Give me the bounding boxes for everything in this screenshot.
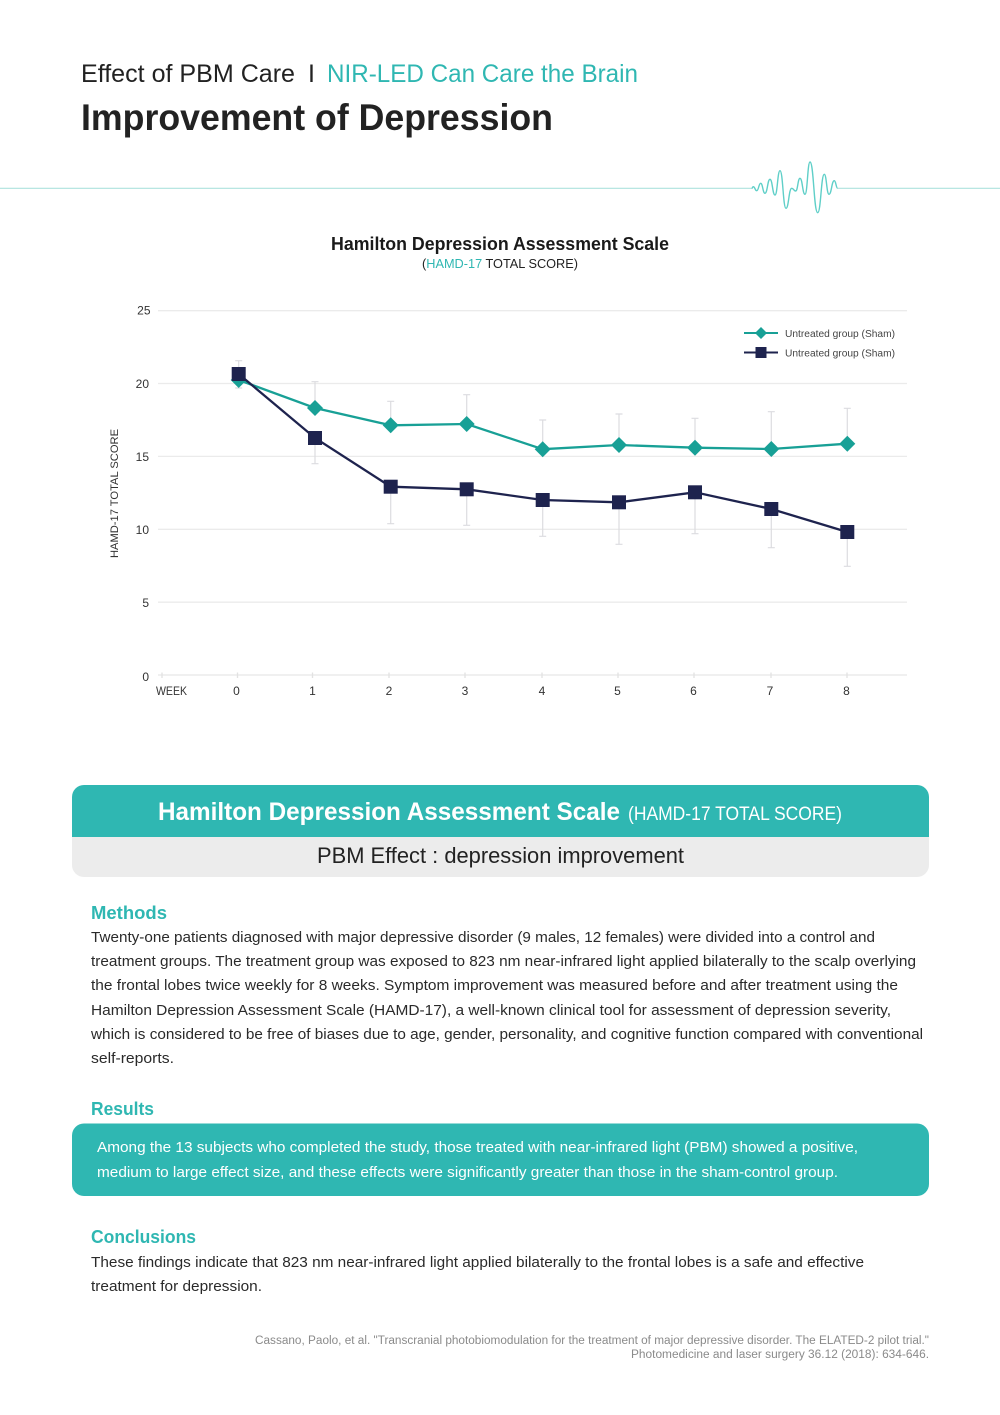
x axis labels: 2 [386,684,393,698]
y axis labels: 5 [142,596,149,610]
section: conclusions [91,1226,864,1295]
section: methods: Methods [91,902,167,923]
section: results: Among the 13 subjects who completed the study, those treated with near-infrared light (PBM) showed a positive, [97,1139,858,1156]
banner: (HAMD-17 TOTAL SCORE) [628,804,842,825]
y axis title: HAMD-17 TOTAL SCORE [109,429,121,558]
citation [255,1335,929,1361]
divider with waveform icon [0,162,1000,213]
x axis labels [156,684,850,698]
section: methods [90,902,923,1067]
title: subtitle line [81,60,638,88]
x axis labels: 0 [233,684,240,698]
section: methods: Hamilton Depression Assessment Scale (HAMD-17), a well-known clinical tool for assessment of depression severity, [91,1002,891,1019]
section: methods: self-reports. [91,1050,174,1067]
title: subtitle line: NIR-LED Can Care the Brain [327,60,638,88]
series: teal line with diamonds [231,372,855,457]
chart title: Hamilton Depression Assessment Scale [331,234,669,254]
citation: Cassano, Paolo, et al. "Transcranial photobiomodulation for the treatment of major depressive disorder. The ELATED-2 pilot trial." [255,1335,929,1347]
section: conclusions: treatment for depression. [91,1278,262,1295]
title: main heading: Improvement of Depression [81,97,553,138]
x axis labels: WEEK [156,684,187,698]
y axis labels: 15 [136,450,149,464]
x axis labels: 1 [309,684,316,698]
y axis labels: 25 [137,304,151,318]
section: conclusions: Conclusions [91,1226,196,1247]
banner: Hamilton Depression Assessment Scale [158,798,620,826]
title: subtitle line: Effect of PBM Care [81,60,295,88]
section: conclusions: These findings indicate that 823 nm near-infrared light applied bilaterally to the frontal lobes is a safe and effective [91,1254,864,1271]
y axis labels: 10 [136,523,149,537]
section: results: Results [91,1098,154,1119]
x axis labels: 6 [690,684,697,698]
section: methods: Twenty-one patients diagnosed with major depressive disorder (9 males, 12 females) were divided into a control and [91,929,875,946]
legend: Untreated group (Sham) [785,329,895,340]
line chart [109,304,907,698]
series: navy line with squares [232,367,854,539]
x axis labels: 7 [767,684,774,698]
y axis labels: 20 [136,377,149,391]
section: results: medium to large effect size, and these effects were significantly greater than those in the sham-control group. [97,1164,838,1181]
x axis labels: 5 [614,684,621,698]
section: results [72,1098,929,1196]
section: methods: the frontal lobes twice weekly for 8 weeks. Symptom improvement was measured before and after treatment using the [91,977,898,994]
error bars [235,361,851,566]
section: methods: treatment groups. The treatment group was exposed to 823 nm near-infrared light applied bilaterally to the scalp overlying [91,953,916,970]
y axis labels: 0 [142,670,149,684]
section: methods: which is considered to be free of biases due to age, gender, personality, and cognitive function compared with conventional [90,1026,923,1043]
y axis labels [136,304,151,684]
chart subtitle: (HAMD-17 TOTAL SCORE) [422,256,578,271]
x axis labels: 3 [462,684,469,698]
legend [744,327,895,359]
x axis labels: 8 [843,684,850,698]
citation: Photomedicine and laser surgery 36.12 (2018): 634-646. [631,1349,929,1361]
banner: PBM Effect : depression improvement [317,843,684,868]
x axis labels: 4 [539,684,546,698]
title: subtitle line: I [308,60,315,88]
banner [72,785,929,877]
legend: Untreated group (Sham) [785,348,895,359]
